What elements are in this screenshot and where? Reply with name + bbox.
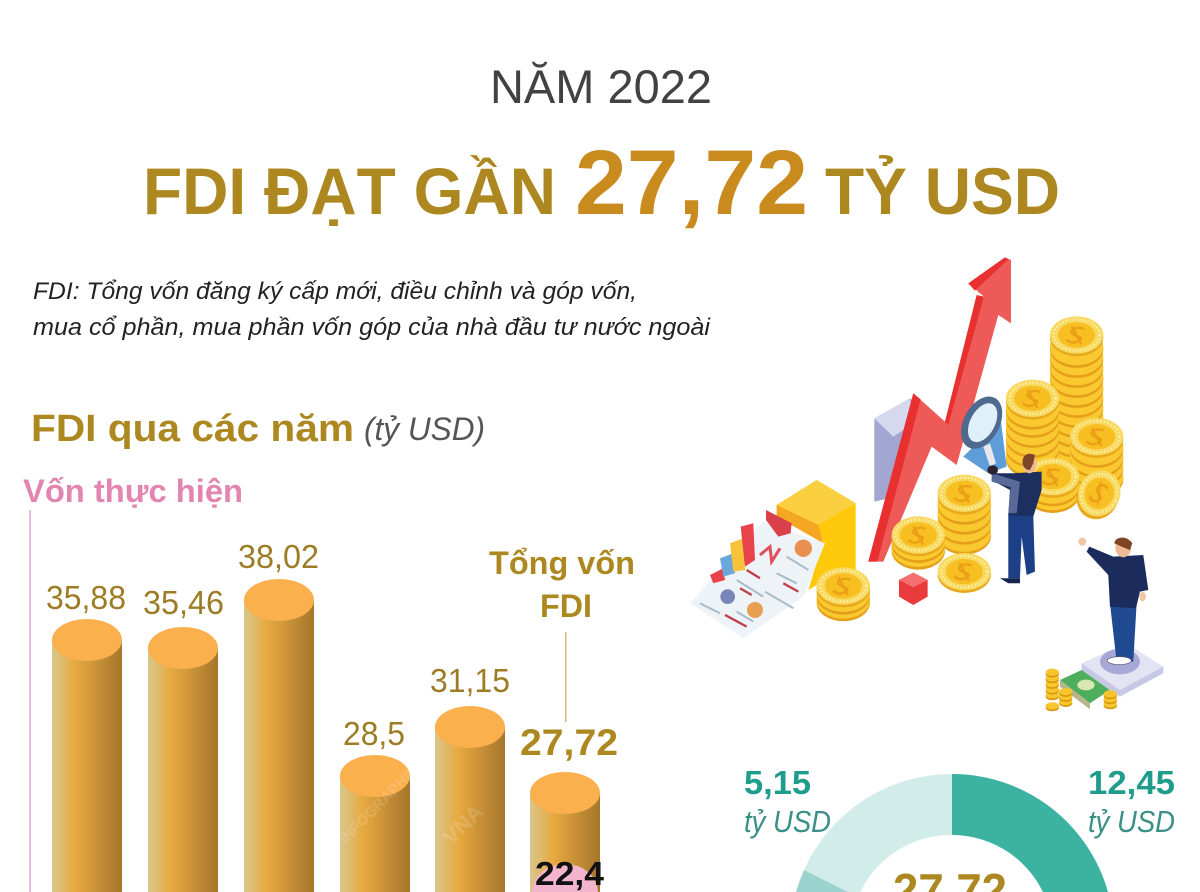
heading: FDI over the years [31,408,485,450]
text block: FDI definition [33,278,711,341]
label: total FDI capital: Tổng vốn [489,545,635,581]
icon: pointing man [1078,537,1148,665]
label: 12,45 billion USD [1088,764,1175,839]
segment: 12,45 [952,774,1140,892]
bar: 38,02: 38,02 [238,538,319,575]
icon: single coin [938,553,991,593]
illustration: investment growth [690,257,1163,711]
text block: FDI definition: FDI: Tổng vốn đăng ký cấp mới, điều chỉnh và góp vốn, [33,278,637,305]
icon: magnifying glass [953,389,1011,467]
watermark: VNA [438,799,488,850]
icon: small coin stack [1026,458,1079,513]
icon: low coin stack [892,516,945,570]
label: 5,15 billion USD: 5,15 [744,764,811,801]
bar: 31,15 [430,662,510,892]
bar: 38,02 [238,538,319,892]
segment: lower left [790,870,858,892]
icon: report document [690,510,825,638]
bar: 28,5: 28,5 [343,715,405,752]
label: 12,45 billion USD: tỷ USD [1088,804,1175,839]
icon: scale platform [1082,643,1163,697]
icon: blue block [963,413,1007,473]
icon: coins by document [817,567,870,621]
icon: yellow block [777,480,856,590]
bar: 27,72 with realised 22,4: 27,72 [520,722,618,763]
icon: man with magnifier [987,453,1042,583]
title: FDI headline: TỶ USD [825,154,1060,228]
bar: 35,46: 35,46 [143,584,224,621]
donut chart: FDI by component [790,774,1140,892]
icon: upright coin [1069,463,1128,526]
title: FDI headline: FDI ĐẠT GẦN [143,154,556,228]
icon: tall coin stack [1050,316,1103,478]
bar chart: FDI by year [46,538,635,892]
label: total FDI capital [489,545,635,722]
heading: FDI over the years: (tỷ USD) [364,411,485,447]
bar: 35,88 [46,579,126,892]
watermark: INFOGRAPHICS [336,754,429,848]
axis label: realised capital: Vốn thực hiện [23,473,243,509]
bar: 27,72 with realised 22,4 [520,722,618,892]
label: total FDI capital: FDI [540,588,592,624]
bar: 27,72 with realised 22,4: 22,4 [535,855,605,892]
title: FDI headline: 27,72 [575,132,808,234]
icon: red cube [899,573,928,605]
icon: red arrow [868,257,1011,562]
bar: 35,46 [143,584,224,892]
icon: lilac block [874,398,920,502]
label: 5,15 billion USD [744,764,831,839]
label: 5,15 billion USD: tỷ USD [744,804,831,839]
bar: 28,5 [340,715,410,892]
title: FDI headline [143,132,1060,234]
icon: right coin stack [1070,418,1123,498]
bar: 31,15: 31,15 [430,662,510,699]
title: year: NĂM 2022 [490,60,712,113]
text block: FDI definition: mua cổ phần, mua phần vốn góp của nhà đầu tư nước ngoài [33,314,711,341]
icon: middle coin stack [1006,380,1059,478]
label: 12,45 billion USD: 12,45 [1088,764,1175,801]
heading: FDI over the years: FDI qua các năm [31,408,354,450]
segment: 5,15 [804,774,952,892]
bar: 35,88: 35,88 [46,579,126,616]
watermark [336,754,488,850]
icon: money and coins [1046,669,1117,711]
icon: coin stack beside arrow [938,475,991,555]
